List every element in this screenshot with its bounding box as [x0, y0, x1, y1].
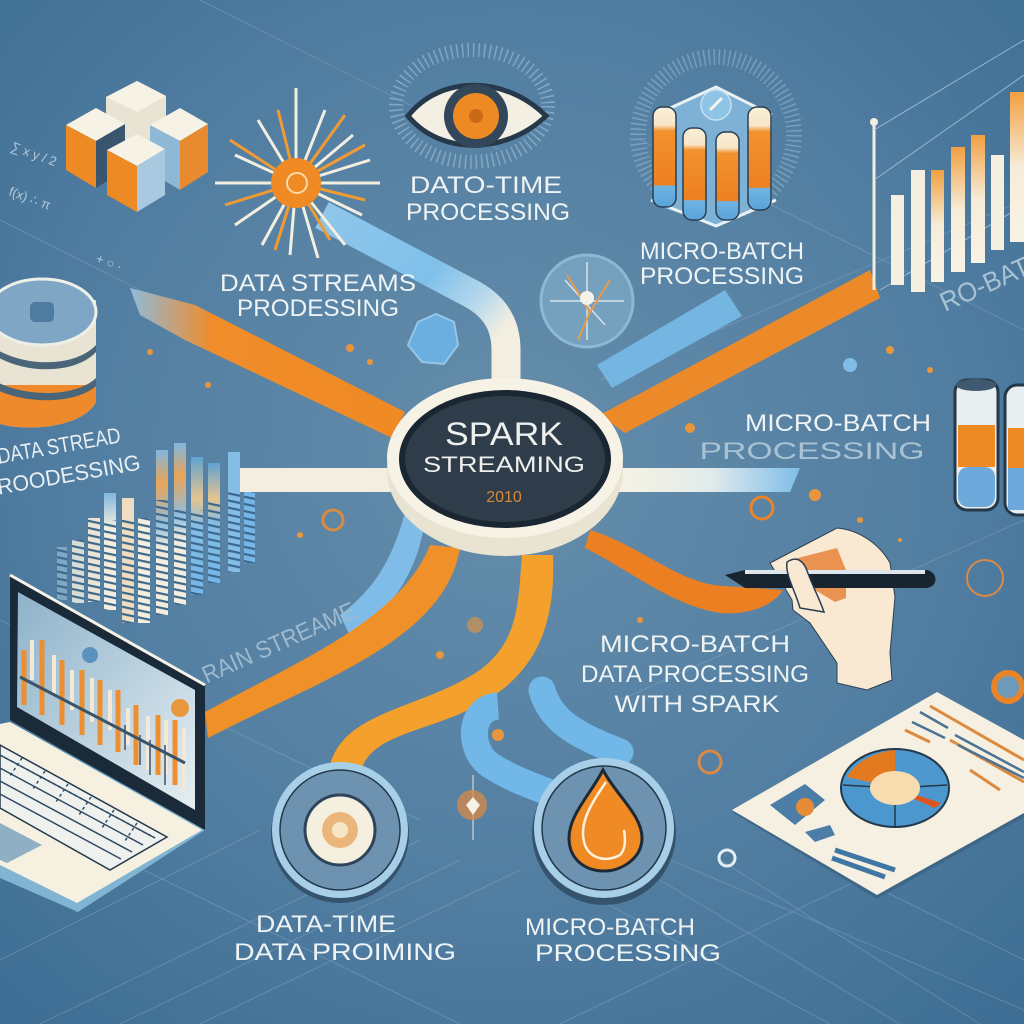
label: Micro-Batch Processing bottom: PROCESSING — [535, 940, 721, 967]
central hub: Spark Streaming: 2010 — [486, 489, 522, 506]
label: Micro-Batch Data Processing with Spark: WITH SPARK — [614, 691, 780, 718]
icon: small orange ring right — [994, 673, 1022, 701]
label: Micro-Batch right — [700, 410, 931, 465]
label: Micro-Batch Data Processing with Spark — [581, 631, 809, 718]
icon: laptop — [0, 575, 205, 912]
ribbon: upper left orange — [130, 288, 405, 438]
icon: data cubes — [66, 81, 208, 212]
decorative notes top left: ∑ x y / 2 — [9, 139, 59, 169]
ribbon: bottom blue right — [542, 690, 620, 752]
decorative notes top left — [7, 139, 124, 274]
label: Micro-Batch Processing bottom — [525, 914, 721, 967]
icon: orange drop node — [532, 758, 676, 905]
icon: eye — [396, 50, 548, 162]
label: Data-Time Data Proiming — [234, 911, 456, 966]
icon: hand holding pen — [725, 528, 936, 690]
label: Data-Time Data Proiming: DATA PROIMING — [234, 939, 456, 966]
decorative notes top left: + ○ ∙ — [94, 251, 124, 274]
ribbon: bottom orange — [330, 555, 553, 768]
label: Data Streams Processing — [220, 270, 416, 322]
label: Micro-Batch Data Processing with Spark: MICRO-BATCH — [600, 631, 790, 658]
ribbon: upper right light blue — [597, 290, 742, 388]
ribbon: bottom blue left — [474, 706, 548, 792]
label: Micro-Batch right: MICRO-BATCH — [745, 410, 931, 437]
ribbon: right cream blue — [618, 468, 800, 492]
label: Micro-Batch Processing top — [640, 238, 804, 290]
ribbon: lower right orange — [585, 530, 783, 613]
label: Dato-Time Processing: PROCESSING — [406, 199, 570, 226]
ribbon: upper right orange — [600, 270, 880, 433]
ribbon: top light blue to center — [322, 215, 506, 385]
central hub: Spark Streaming: STREAMING — [423, 452, 585, 477]
label: Micro-Batch Processing top: PROCESSING — [640, 263, 804, 290]
label: Data Stream Processing left — [0, 422, 142, 500]
label: Micro-Batch right: PROCESSING — [700, 438, 924, 465]
icon: compass lens — [541, 255, 633, 347]
chart: wave bars left — [57, 443, 255, 623]
icon: sun burst — [215, 88, 380, 258]
icon: small rings — [323, 497, 1003, 866]
label: Micro-Batch Data Processing with Spark: DATA PROCESSING — [581, 661, 809, 688]
label: Dato-Time Processing: DATO-TIME — [410, 172, 562, 199]
label: faded Rain Stream: RAIN STREAME — [198, 597, 360, 689]
panel: report sheet with pie chart — [732, 692, 1024, 899]
icon: micro-batch cylinders — [638, 57, 794, 226]
label: Dato-Time Processing — [406, 172, 570, 226]
ribbon: left cream — [240, 468, 395, 492]
label: Data Streams Processing: PRODESSING — [237, 295, 399, 322]
ribbon: lower left orange — [205, 545, 460, 738]
icon: small node bulb — [457, 775, 487, 840]
ribbon: lower left blue — [340, 512, 424, 640]
icon: test tubes — [955, 379, 1024, 515]
icon: database stack — [0, 279, 96, 427]
label: Micro-Batch Processing bottom: MICRO-BATCH — [525, 914, 695, 941]
label: Micro-Batch Processing top: MICRO-BATCH — [640, 238, 804, 265]
chart: bar chart top right — [870, 40, 1024, 292]
central hub: Spark Streaming — [387, 378, 623, 556]
decorative data particles — [147, 344, 933, 741]
icon: circular data node — [271, 762, 409, 903]
label: Data Streams Processing: DATA STREAMS — [220, 270, 416, 297]
central hub: Spark Streaming: SPARK — [445, 416, 563, 452]
icon: hexagon — [408, 314, 458, 364]
decorative notes top left: f(x) ∴ π — [7, 184, 53, 213]
label: Data-Time Data Proiming: DATA-TIME — [256, 911, 396, 938]
